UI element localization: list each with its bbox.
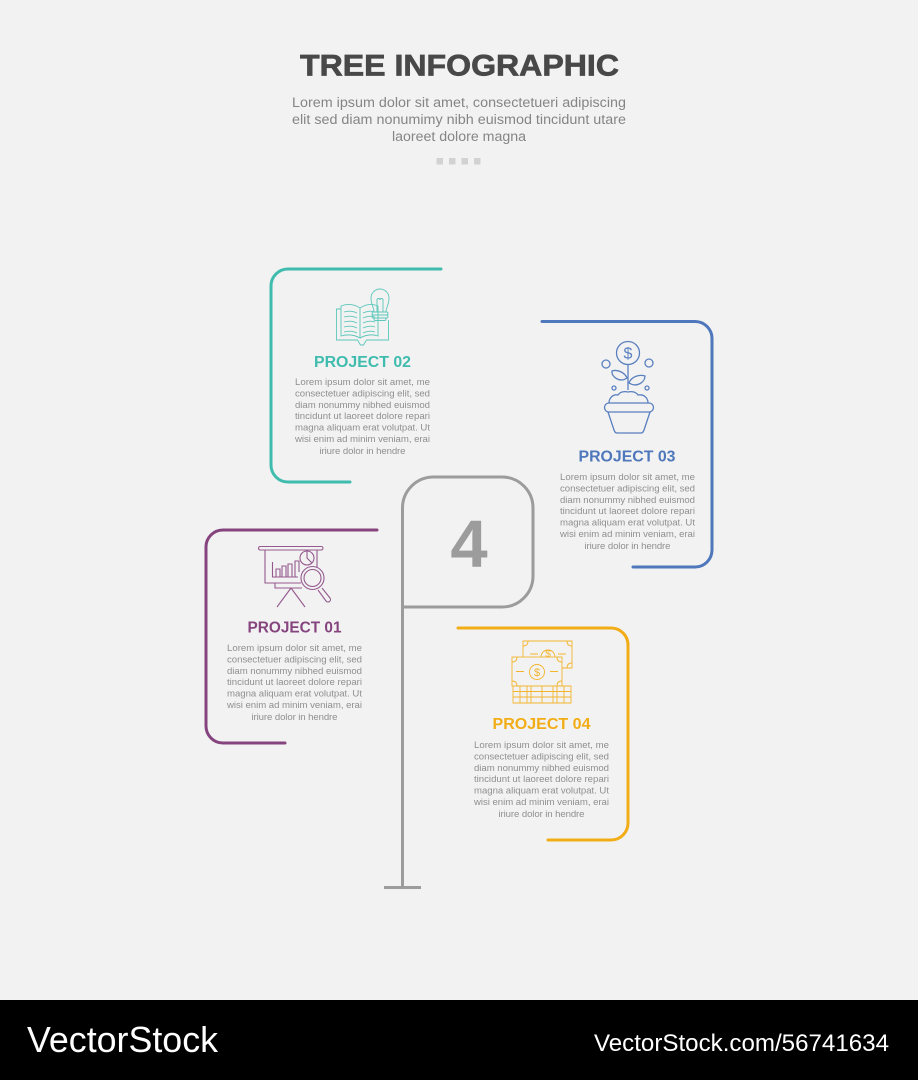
text block: project 04: wisi enim ad minim veniam, erai: [473, 797, 609, 808]
text block: project 01: tincidunt ut laoreet dolore repari: [227, 677, 362, 688]
text block: project 01: consectetuer adipiscing elit, sed: [227, 654, 362, 666]
text block: project 03: tincidunt ut laoreet dolore repari: [560, 506, 695, 517]
text block: project 03: magna aliquam erat volutpat. Ut: [560, 518, 695, 528]
subtitle text block: laoreet dolore magna: [392, 129, 526, 145]
text block: project 02: tincidunt ut laoreet dolore repari: [295, 411, 430, 422]
text block: project 03: wisi enim ad minim veniam, erai: [559, 529, 695, 540]
text block: project 02: wisi enim ad minim veniam, erai: [294, 434, 430, 445]
heading: project 02: PROJECT 02: [314, 354, 411, 371]
text block: project 03: consectetuer adipiscing elit, sed: [560, 484, 695, 494]
footer bar: VectorStock watermark: VectorStock: [27, 1019, 219, 1060]
text block: project 03: [559, 472, 695, 552]
text block: project 04: Lorem ipsum dolor sit amet, me: [474, 740, 609, 751]
icon: banknotes and stack: $: [534, 667, 540, 679]
title divider dots: [436, 158, 480, 164]
text block: project 02: Lorem ipsum dolor sit amet, me: [295, 377, 430, 388]
text block: project 04: [473, 740, 609, 820]
text block: project 03: Lorem ipsum dolor sit amet, me: [560, 472, 695, 483]
text block: project 04: diam nonummy nibhed euismod: [474, 763, 609, 774]
tree trunk and centre number box: [384, 477, 533, 888]
text block: project 03: iriure dolor in hendre: [584, 541, 670, 552]
title: TREE INFOGRAPHIC: [300, 50, 619, 82]
icon: banknotes and stack: $: [545, 649, 551, 660]
panel: project 03: [542, 322, 712, 567]
icon: banknotes and stack: [512, 641, 572, 703]
subtitle text block: Lorem ipsum dolor sit amet, consectetueri adipiscing: [292, 95, 626, 111]
subtitle text block: elit sed diam nonumimy nibh euismod tincidunt utare: [292, 112, 626, 128]
icon: money plant in pot: $: [624, 346, 633, 362]
footer bar: VectorStock watermark: VectorStock.com/56741634: [594, 1030, 889, 1057]
text block: project 02: iriure dolor in hendre: [320, 446, 406, 457]
text block: project 02: consectetuer adipiscing elit, sed: [295, 388, 430, 400]
text block: project 04: iriure dolor in hendre: [498, 809, 584, 820]
text block: project 04: consectetuer adipiscing elit, sed: [474, 752, 609, 762]
text block: project 02: diam nonummy nibhed euismod: [295, 400, 430, 411]
panel: project 02: [271, 269, 441, 482]
text block: project 01: Lorem ipsum dolor sit amet, me: [227, 643, 362, 654]
text block: project 01: diam nonummy nibhed euismod: [227, 666, 362, 677]
text block: project 01: wisi enim ad minim veniam, erai: [226, 700, 362, 711]
text block: project 04: tincidunt ut laoreet dolore repari: [474, 774, 609, 785]
panel: project 04: [458, 628, 628, 840]
icon: money plant in pot: [602, 342, 654, 433]
text block: project 01: magna aliquam erat volutpat. Ut: [227, 688, 362, 700]
footer bar: VectorStock watermark: [0, 1000, 918, 1080]
tree trunk and centre number box: 4: [450, 507, 488, 582]
text block: project 04: magna aliquam erat volutpat. Ut: [474, 786, 609, 796]
heading: project 04: PROJECT 04: [492, 716, 591, 733]
text block: project 01: [226, 643, 362, 723]
heading: project 03: PROJECT 03: [578, 448, 676, 466]
panel: project 01: [206, 530, 377, 743]
heading: project 01: PROJECT 01: [248, 620, 342, 636]
icon: presentation board with magnifier: [258, 546, 330, 607]
icon: book and light bulb: [336, 289, 389, 345]
text block: project 01: iriure dolor in hendre: [252, 712, 338, 723]
text block: project 02: [294, 377, 430, 457]
text block: project 02: magna aliquam erat volutpat. Ut: [295, 422, 430, 434]
text block: project 03: diam nonummy nibhed euismod: [560, 495, 695, 506]
subtitle text block: [292, 95, 626, 145]
